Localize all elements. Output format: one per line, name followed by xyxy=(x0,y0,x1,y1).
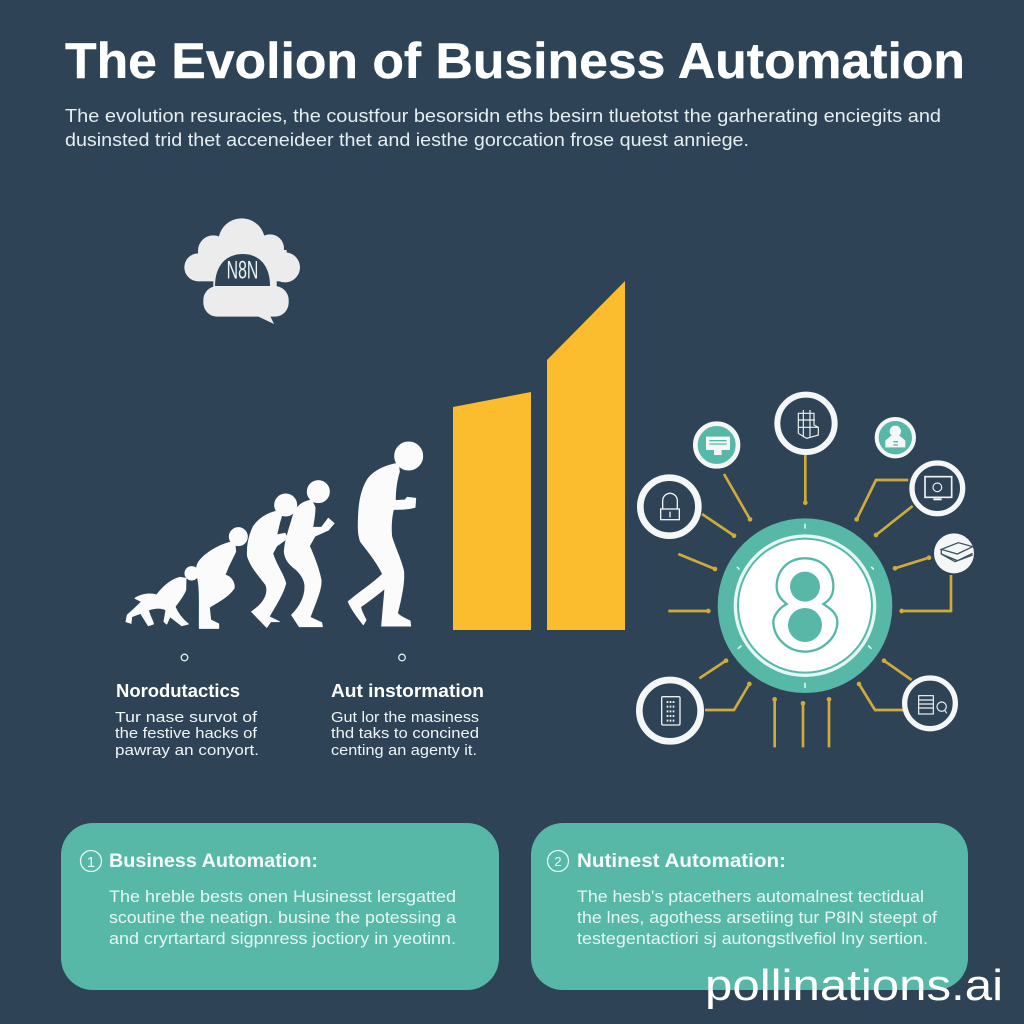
timeline marker left xyxy=(181,654,188,661)
card body text xyxy=(109,888,457,948)
text block: Aut instormation: Gut lor the masiness xyxy=(331,709,479,726)
card body text: and cryrtartard sigpnress joctiory in yeotinn. xyxy=(109,930,456,948)
text block: Norodutactics: the festive hacks of xyxy=(115,725,258,742)
number badge 2 xyxy=(548,850,568,872)
bar chart xyxy=(453,281,625,630)
text block: Norodutactics: Norodutactics xyxy=(116,681,240,701)
intro text block: dusinsted trid thet acceneideer thet and iesthe gorccation frose quest anniege. xyxy=(65,130,749,150)
text block: Aut instormation xyxy=(331,681,484,759)
central 8 badge xyxy=(718,518,892,693)
card body text: testegentactiori sj autongstlvefiol lny sertion. xyxy=(577,930,928,948)
figure: bent hominid xyxy=(247,494,297,627)
figure: quadruped xyxy=(126,567,198,626)
text block: Norodutactics: pawray an conyort. xyxy=(115,742,259,759)
evolution silhouettes xyxy=(126,442,423,628)
icon: monitor xyxy=(912,463,963,514)
text block: Aut instormation: centing an agenty it. xyxy=(331,742,477,759)
card body text xyxy=(577,888,937,948)
card body text: The hreble bests onen Husinesst lersgatted xyxy=(109,888,456,906)
figure: crouching hominid xyxy=(196,528,247,628)
title: The Evolion of Business Automation xyxy=(65,33,965,89)
connector arrows xyxy=(668,455,951,747)
icon: padlock xyxy=(640,478,698,536)
panel: Nutinest Automation xyxy=(531,823,968,990)
icon: message screen xyxy=(695,424,738,466)
figure: upright human xyxy=(348,442,423,626)
card heading: Nutinest Automation: xyxy=(577,851,786,872)
text block: Aut instormation: thd taks to concined xyxy=(331,725,479,742)
n8n hub diagram xyxy=(639,395,974,747)
icon: N8N cloud speech bubble: N8N xyxy=(227,257,258,284)
icon: N8N cloud speech bubble xyxy=(184,218,300,324)
text block: Norodutactics: Tur nase survot of xyxy=(115,709,258,726)
text block: Norodutactics xyxy=(115,681,259,759)
figure: stooped human xyxy=(284,481,334,627)
intro text block xyxy=(65,106,941,150)
number badge 2: 2 xyxy=(554,854,562,869)
number badge 1 xyxy=(80,850,102,872)
intro text block: The evolution resuracies, the coustfour besorsidn eths besirn tluetotst the garherating enciegits and xyxy=(65,106,941,126)
icon: building document xyxy=(639,680,701,741)
card body text: The hesb's ptacethers automalnest tectidual xyxy=(577,888,924,906)
card heading: Business Automation: xyxy=(109,851,318,872)
icon: person badge xyxy=(877,419,914,456)
card body text: scoutine the neatign. busine the potessing a xyxy=(109,909,457,927)
card body text: the lnes, agothess arsetiing tur P8IN steept of xyxy=(577,909,937,927)
timeline marker right xyxy=(399,654,405,661)
icon: document with chat xyxy=(905,678,955,729)
panel: Business Automation xyxy=(61,823,499,990)
number badge 1: 1 xyxy=(87,854,95,871)
text block: Aut instormation: Aut instormation xyxy=(331,681,484,701)
icon: stacked books xyxy=(934,533,974,573)
icon: B lattice xyxy=(777,395,835,452)
watermark: pollinations.ai xyxy=(705,961,1003,1010)
